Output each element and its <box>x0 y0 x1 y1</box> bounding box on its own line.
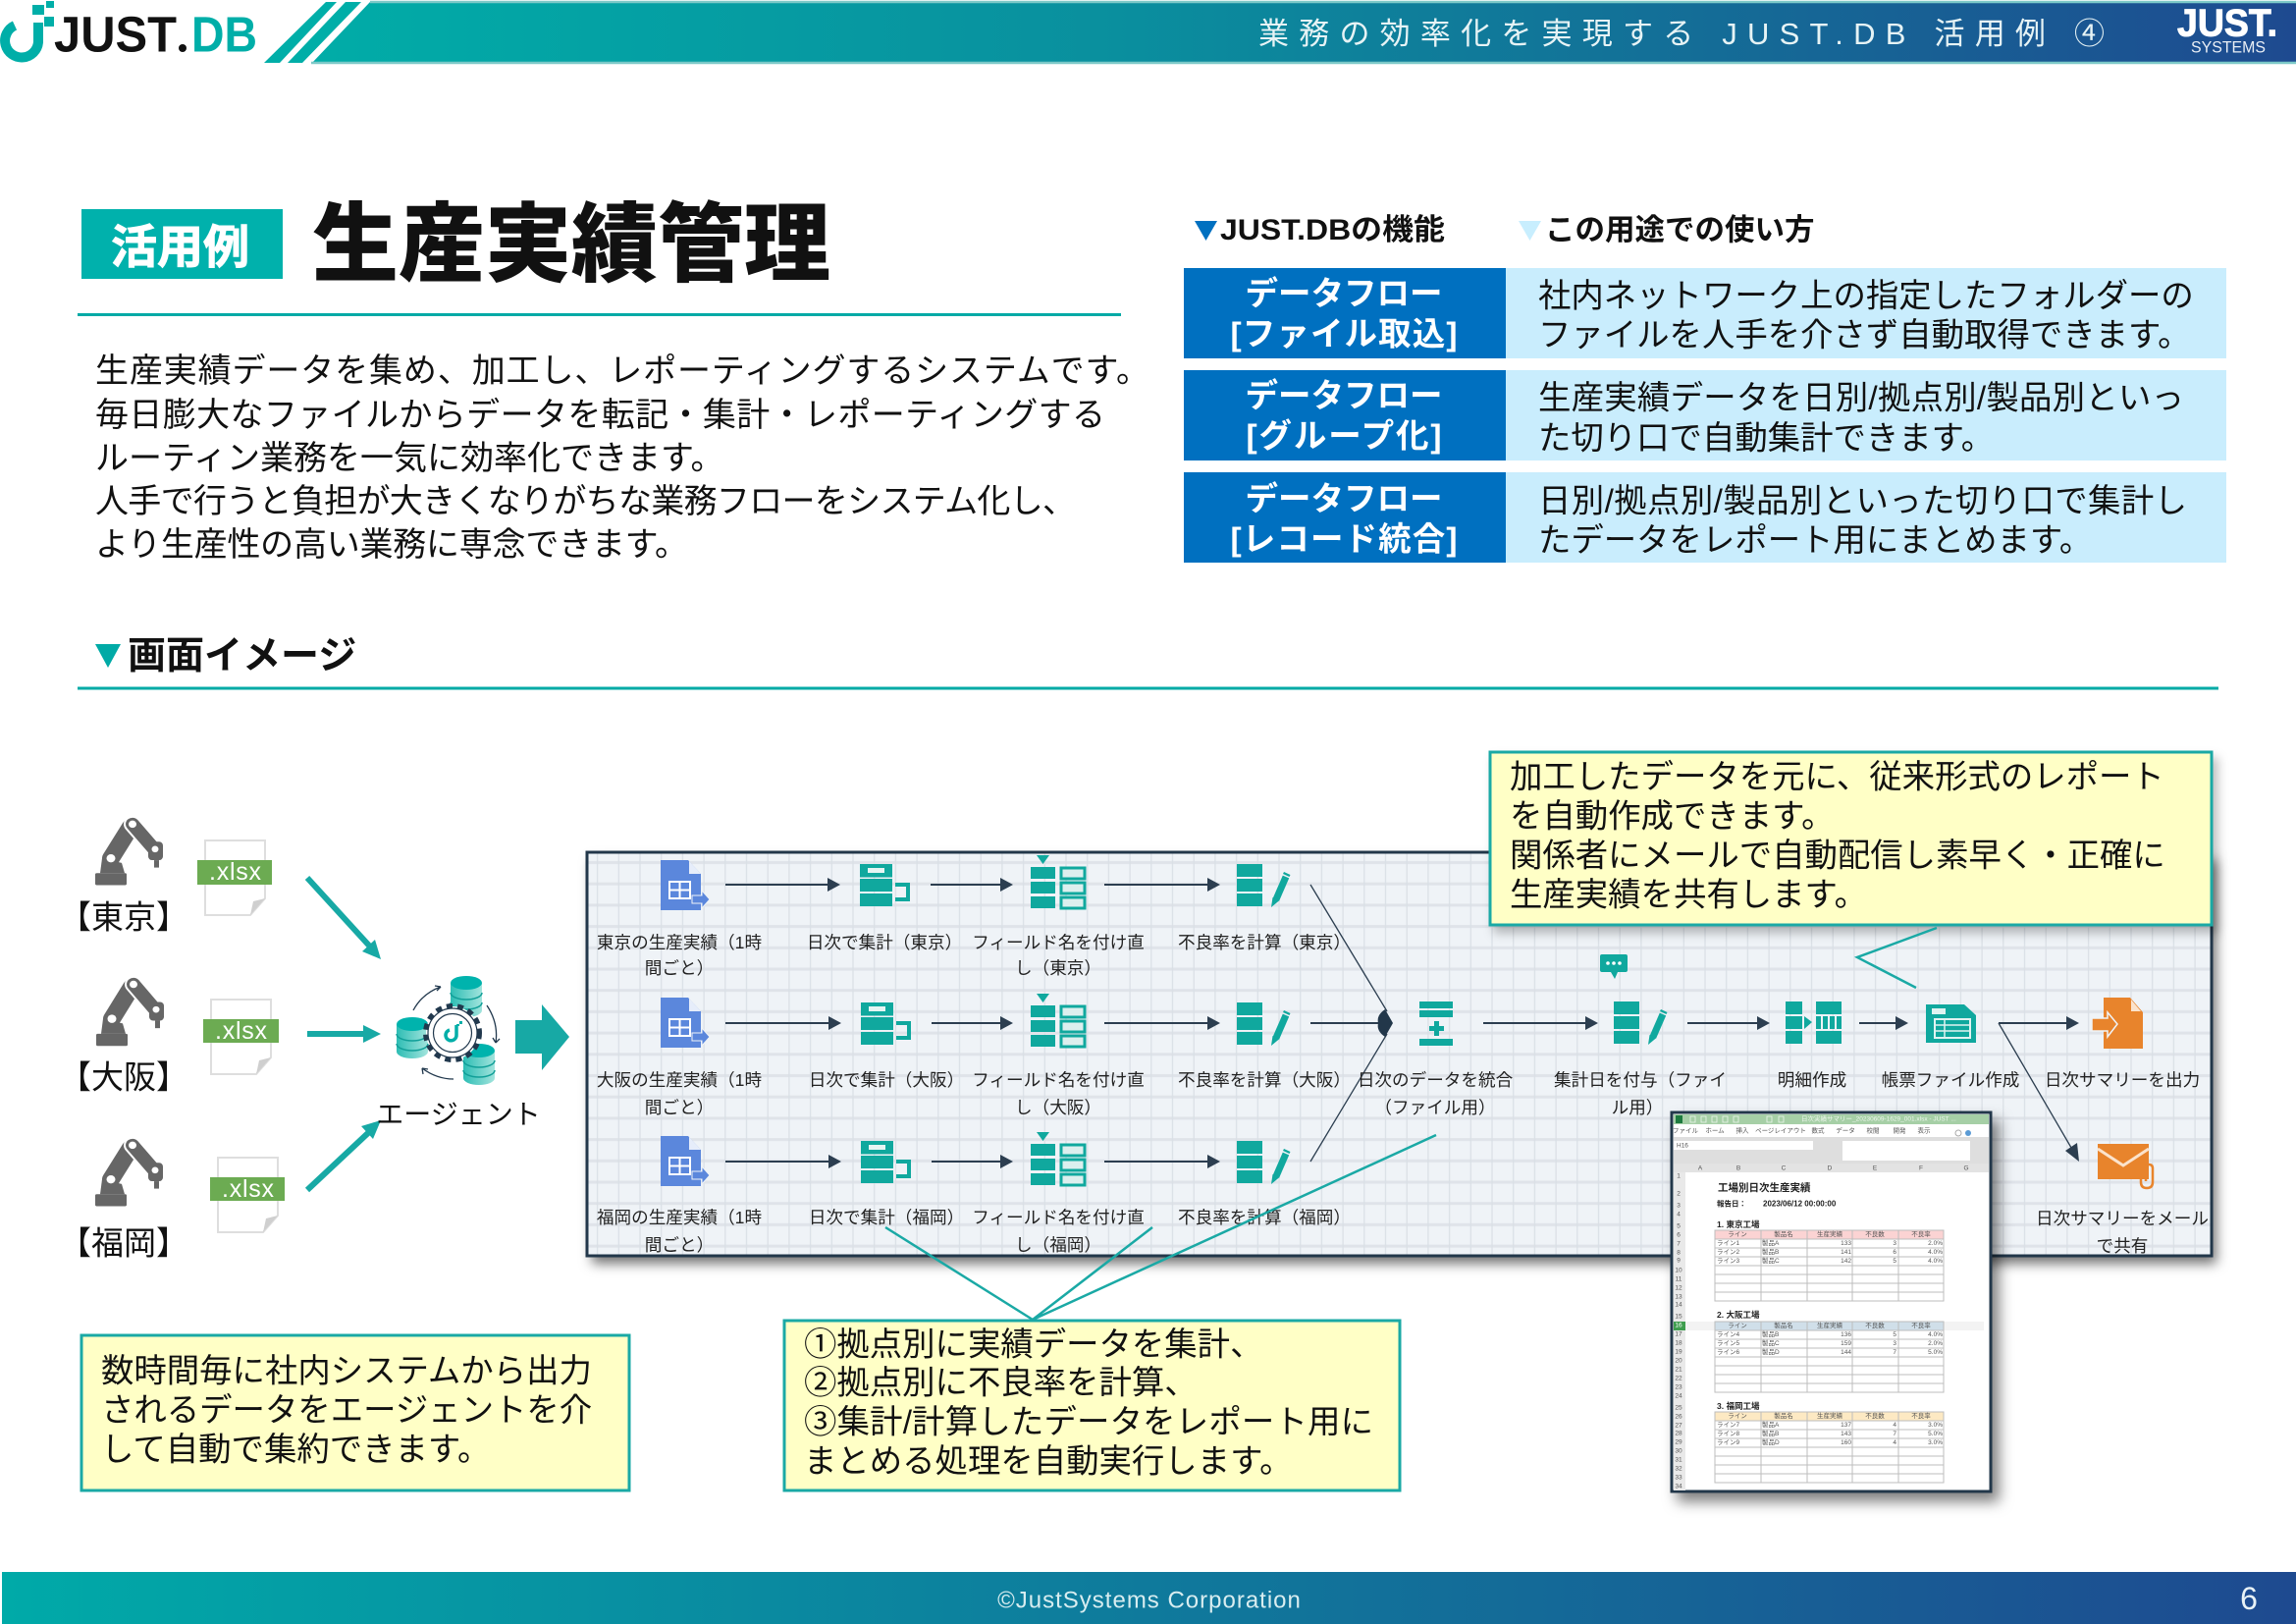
excel column headers: F <box>1919 1164 1923 1172</box>
icon: agent <box>397 976 500 1085</box>
sheet table: 福岡工場: ライン9 <box>1717 1438 1739 1446</box>
excel row headers: 27 <box>1675 1422 1682 1430</box>
callout: agent collection: 数時間毎に社内システムから出力 <box>101 1353 592 1389</box>
flow row: 大阪: 大阪の生産実績（1時 <box>597 1070 762 1090</box>
sheet table: 福岡工場: 生産実績 <box>1817 1411 1843 1420</box>
feature row: グループ化: た切り口で自動集計できます。 <box>1538 420 1994 457</box>
excel row headers: 19 <box>1675 1349 1682 1355</box>
excel row headers: 4 <box>1677 1212 1681 1218</box>
site: 大阪: 【大阪】 <box>59 1058 188 1096</box>
sheet table: 大阪工場: 5 <box>1893 1331 1896 1338</box>
sheet table: 東京工場: ライン3 <box>1717 1257 1739 1265</box>
feature row: グループ化: [グループ化] <box>1247 418 1441 455</box>
feature row: レコード統合: データフロー <box>1245 480 1443 517</box>
excel ribbon tabs: ファイル <box>1673 1127 1698 1135</box>
header band <box>264 2 2296 64</box>
arrow: 大阪 to agent <box>307 1025 381 1043</box>
sheet table: 東京工場: 142 <box>1841 1258 1851 1265</box>
excel row headers: 34 <box>1675 1483 1682 1490</box>
flow label: 統合: （ファイル用） <box>1374 1098 1496 1117</box>
excel row headers: 32 <box>1675 1465 1682 1473</box>
excel row headers: 1 <box>1677 1172 1681 1180</box>
callout: report creation: 加工したデータを元に、従来形式のレポート <box>1510 759 2164 795</box>
excel row headers: 14 <box>1675 1302 1682 1308</box>
excel row headers: 16 <box>1675 1322 1682 1329</box>
sheet table: 福岡工場: 3. 福岡工場 <box>1717 1401 1760 1411</box>
excel ribbon tabs: データ <box>1836 1125 1855 1135</box>
sheet table: 福岡工場: 3.0% <box>1928 1439 1943 1446</box>
description text: ルーティン業務を一気に効率化できます。 <box>95 440 724 477</box>
header title: 業務の効率化を実現する JUST.DB 活用例 ④ <box>1258 17 2105 51</box>
flow step: 集計日を付与: ル用） <box>1612 1098 1663 1117</box>
flow step: 帳票ファイル作成: 帳票ファイル作成 <box>1882 1070 2019 1090</box>
logo: JUST SYSTEMS: JUST. <box>2177 2 2277 45</box>
sheet table: 東京工場: 141 <box>1841 1249 1851 1256</box>
flow row: 東京: 東京の生産実績（1時 <box>597 933 762 952</box>
sheet title: 工場別日次生産実績 <box>1718 1181 1811 1194</box>
excel column headers <box>1674 1164 1989 1172</box>
heading: JUST.DBの機能: JUST.DBの機能 <box>1220 214 1445 246</box>
flow step: 日次サマリーを出力 <box>1999 998 2200 1090</box>
sheet table: 東京工場: 4.0% <box>1928 1258 1943 1265</box>
site: 大阪: .xlsx <box>215 1017 267 1045</box>
sheet table: 大阪工場: 製品D <box>1762 1347 1780 1356</box>
sheet table: 大阪工場: 製品名 <box>1774 1321 1793 1329</box>
excel row headers: 18 <box>1675 1339 1682 1347</box>
sheet table: 福岡工場: 製品A <box>1762 1420 1780 1429</box>
excel title bar <box>1674 1113 1989 1124</box>
feature row: グループ化: データフロー <box>1245 377 1443 414</box>
excel title bar: 日次実績サマリー_20230609-1629_001.xlsx - JUST ... <box>1801 1113 1956 1123</box>
excel formula bar: H16 <box>1677 1143 1688 1149</box>
sheet table: 福岡工場: ライン <box>1728 1412 1747 1420</box>
excel row headers: 26 <box>1675 1414 1682 1420</box>
sheet table: 東京工場: 製品名 <box>1774 1229 1793 1238</box>
copyright: ©JustSystems Corporation <box>997 1587 1302 1614</box>
sheet table: 大阪工場: 2.0% <box>1928 1340 1943 1347</box>
feature row: レコード統合: 日別/拠点別/製品別といった切り口で集計し <box>1538 483 2187 519</box>
excel column headers: C <box>1782 1164 1787 1172</box>
excel column headers: D <box>1828 1164 1833 1172</box>
callout: processing <box>784 1321 1400 1490</box>
excel row headers: 2 <box>1677 1190 1681 1198</box>
sheet table: 大阪工場: 3 <box>1893 1340 1896 1347</box>
feature row: ファイル取込: ファイルを人手を介さず自動取得できます。 <box>1538 317 2190 353</box>
icon: comment bubble <box>1600 954 1628 979</box>
flow row: 福岡: フィールド名を付け直 <box>972 1208 1145 1227</box>
sheet table: 東京工場: 5 <box>1893 1258 1896 1265</box>
callout pointers: processing <box>885 1135 1436 1320</box>
sheet table: 大阪工場: 136 <box>1841 1331 1851 1338</box>
excel row headers: 33 <box>1675 1475 1682 1481</box>
badge: 活用例: 活用例 <box>111 221 249 273</box>
sheet table: 大阪工場: 4.0% <box>1928 1331 1943 1338</box>
panel: data flow screenshot <box>587 852 2212 1256</box>
sheet table: 東京工場: 製品C <box>1762 1256 1780 1265</box>
sheet table: 東京工場: 6 <box>1893 1249 1896 1256</box>
site: 東京: .xlsx <box>209 858 261 886</box>
callout: processing: ③集計/計算したデータをレポート用に <box>804 1404 1373 1440</box>
flow row: 東京: フィールド名を付け直 <box>972 933 1145 952</box>
excel row headers: 7 <box>1677 1241 1681 1247</box>
excel row headers: 6 <box>1677 1231 1681 1239</box>
arrow: 東京 to agent <box>307 878 381 959</box>
sheet table: 福岡工場: 製品名 <box>1774 1411 1793 1420</box>
sheet table: 福岡工場: 製品D <box>1762 1437 1780 1446</box>
feature row: ファイル取込 <box>1184 268 2226 358</box>
sheet table: 大阪工場: 5.0% <box>1928 1349 1943 1356</box>
flow row: 福岡: 福岡の生産実績（1時 <box>597 1208 762 1227</box>
excel ribbon tabs <box>1673 1125 1971 1136</box>
excel row headers: 31 <box>1675 1457 1682 1463</box>
callout: report creation: 生産実績を共有します。 <box>1510 877 1867 913</box>
sheet table: 大阪工場 <box>1715 1310 1944 1392</box>
logo: JUST SYSTEMS: SYSTEMS <box>2191 37 2266 57</box>
sheet table: 大阪工場: ライン <box>1728 1322 1747 1329</box>
flow row: 大阪: フィールド名を付け直 <box>972 1070 1145 1090</box>
sheet table: 東京工場: 4.0% <box>1928 1249 1943 1256</box>
sheet table: 東京工場: 2.0% <box>1928 1240 1943 1247</box>
feature row: ファイル取込: [ファイル取込] <box>1231 316 1457 352</box>
excel row headers: 24 <box>1675 1392 1682 1400</box>
feature row: ファイル取込: データフロー <box>1245 275 1443 312</box>
excel column headers: G <box>1963 1164 1969 1172</box>
excel row headers: 11 <box>1676 1276 1682 1282</box>
excel ribbon tabs: 校閲 <box>1867 1125 1879 1135</box>
flow row: 大阪: 間ごと） <box>645 1098 714 1117</box>
flow label: 統合: 日次のデータを統合 <box>1358 1070 1514 1090</box>
sheet table: 東京工場: ライン2 <box>1717 1248 1739 1256</box>
description text: 生産実績データを集め、加工し、レポーティングするシステムです。 <box>95 352 1149 390</box>
sheet table: 東京工場: 3 <box>1893 1240 1896 1247</box>
excel ribbon tabs: 開発 <box>1893 1125 1906 1135</box>
flow row: 大阪: 日次で集計（大阪） <box>809 1070 964 1090</box>
feature row: レコード統合 <box>1184 472 2226 563</box>
big arrow to flow <box>515 1004 569 1070</box>
flow step: 集計日を付与: 集計日を付与（ファイ <box>1554 1070 1727 1090</box>
flow row: 福岡: 不良率を計算（福岡） <box>1178 1208 1351 1227</box>
excel row headers: 5 <box>1677 1223 1681 1229</box>
excel row headers: 17 <box>1675 1331 1682 1337</box>
excel row headers: 30 <box>1675 1447 1682 1455</box>
merge connectors <box>1310 885 1393 1162</box>
sheet table: 福岡工場: 5.0% <box>1928 1431 1943 1437</box>
callout: report creation: を自動作成できます。 <box>1510 798 1835 835</box>
sheet table: 大阪工場: 不良率 <box>1911 1321 1931 1329</box>
icon: merge step <box>1419 1001 1453 1046</box>
callout pointer: report <box>1857 928 1937 988</box>
flow step: メールで共有: 日次サマリーをメール <box>2036 1209 2209 1228</box>
sheet table: 東京工場: 生産実績 <box>1817 1229 1843 1238</box>
sheet table: 東京工場: 製品B <box>1762 1247 1779 1256</box>
flow row: 大阪: 不良率を計算（大阪） <box>1178 1070 1351 1090</box>
sheet table: 東京工場: 不良数 <box>1865 1229 1885 1238</box>
feature row: レコード統合: [レコード統合] <box>1231 521 1457 558</box>
sheet title <box>1717 1181 1837 1208</box>
excel row headers: 29 <box>1675 1439 1682 1445</box>
flow step: メールで共有 <box>1999 1023 2209 1256</box>
sheet table: 大阪工場: 製品C <box>1762 1338 1780 1347</box>
site: 福岡: 【福岡】 <box>59 1225 188 1261</box>
feature row: ファイル取込: 社内ネットワーク上の指定したフォルダーの <box>1538 278 2194 314</box>
flow row: 東京: 間ごと） <box>645 958 714 978</box>
sheet table: 大阪工場: ライン4 <box>1717 1330 1739 1338</box>
excel row headers: 23 <box>1675 1384 1682 1390</box>
sheet table: 東京工場 <box>1715 1219 1944 1301</box>
excel ribbon tabs: ページレイアウト <box>1755 1127 1806 1135</box>
arrow: 福岡 to agent <box>307 1120 381 1190</box>
description text: 毎日膨大なファイルからデータを転記・集計・レポーティングする <box>95 397 1105 434</box>
flow row: 福岡 <box>597 1132 1351 1255</box>
excel row headers: 22 <box>1675 1375 1682 1382</box>
flow row: 東京: 不良率を計算（東京） <box>1178 933 1351 952</box>
sheet table: 福岡工場: 製品B <box>1762 1429 1779 1437</box>
callout: report creation: 関係者にメールで自動配信し素早く・正確に <box>1510 838 2165 874</box>
site: 東京 <box>59 821 272 935</box>
flow label: 統合 <box>1358 1070 1514 1117</box>
flow row: 東京: 日次で集計（東京） <box>807 933 962 952</box>
sheet table: 福岡工場: 7 <box>1893 1431 1896 1437</box>
excel row headers: 9 <box>1677 1257 1681 1265</box>
excel report window <box>1672 1112 1991 1491</box>
site: 福岡: .xlsx <box>222 1175 275 1203</box>
feature row: レコード統合: たデータをレポート用にまとめます。 <box>1538 522 2092 559</box>
description text: より生産性の高い業務に専念できます。 <box>95 526 688 564</box>
title: 生産実績管理 <box>312 196 830 293</box>
excel ribbon tabs: 挿入 <box>1735 1125 1749 1135</box>
flow row: 福岡: 日次で集計（福岡） <box>809 1208 964 1227</box>
sheet table: 大阪工場: 7 <box>1893 1349 1896 1356</box>
sheet table: 福岡工場: 4 <box>1893 1439 1896 1446</box>
excel row headers: 28 <box>1675 1430 1682 1437</box>
excel ribbon tabs: ホーム <box>1705 1127 1725 1135</box>
excel column headers: B <box>1736 1164 1740 1172</box>
sheet table: 東京工場: 1. 東京工場 <box>1717 1219 1760 1229</box>
excel row headers: 10 <box>1675 1267 1682 1274</box>
excel ribbon tabs: 数式 <box>1812 1125 1825 1135</box>
excel row headers: 20 <box>1675 1357 1682 1365</box>
flow row: 福岡: 間ごと） <box>645 1235 714 1255</box>
heading: 画面イメージ: 画面イメージ <box>128 635 356 677</box>
sheet table: 東京工場: ライン <box>1728 1230 1747 1238</box>
sheet table: 福岡工場: ライン7 <box>1717 1421 1739 1429</box>
excel row headers: 3 <box>1677 1202 1681 1210</box>
flow step: 帳票ファイル作成 <box>1859 1004 2019 1090</box>
callout: agent collection: されるデータをエージェントを介 <box>101 1392 592 1429</box>
site: 大阪 <box>59 981 279 1096</box>
flow row: 東京: し（東京） <box>1015 958 1101 978</box>
callout: processing: まとめる処理を自動実行します。 <box>804 1443 1293 1480</box>
page number: 6 <box>2240 1581 2258 1616</box>
footer band <box>2 1572 2296 1624</box>
flow row: 東京 <box>597 855 1351 978</box>
flow step: 明細作成: 明細作成 <box>1778 1070 1846 1090</box>
flow step: 日次サマリーを出力: 日次サマリーを出力 <box>2045 1070 2200 1090</box>
excel formula bar <box>1674 1137 1989 1164</box>
badge: 活用例 <box>81 209 283 279</box>
callout: agent collection: して自動で集約できます。 <box>101 1432 490 1468</box>
sheet table: 東京工場: 不良率 <box>1911 1229 1931 1238</box>
sheet table: 東京工場: 133 <box>1841 1240 1851 1247</box>
excel row headers: 25 <box>1675 1404 1682 1412</box>
excel row headers: 21 <box>1675 1367 1682 1373</box>
flow row: 福岡: し（福岡） <box>1015 1235 1101 1255</box>
site: 福岡 <box>59 1142 285 1261</box>
excel row headers <box>1674 1172 1984 1490</box>
logo: JUST.DB: DB <box>191 6 257 63</box>
sheet table: 福岡工場: ライン8 <box>1717 1430 1739 1437</box>
callout: report creation <box>1490 752 2212 925</box>
agent label: エージェント <box>376 1100 541 1129</box>
callout: agent collection <box>81 1335 629 1490</box>
sheet table: 福岡工場: 143 <box>1841 1431 1851 1437</box>
sheet table: 東京工場: 製品A <box>1762 1238 1780 1247</box>
sheet table: 大阪工場: 159 <box>1841 1340 1851 1347</box>
description text <box>95 352 1149 564</box>
sheet table: 大阪工場: 生産実績 <box>1817 1321 1843 1329</box>
sheet table: 福岡工場: 3.0% <box>1928 1422 1943 1429</box>
sheet table: 大阪工場: ライン6 <box>1717 1348 1739 1356</box>
excel row headers: 8 <box>1677 1249 1681 1257</box>
flow step: 明細作成 <box>1687 1001 1846 1090</box>
sheet table: 大阪工場: 2. 大阪工場 <box>1717 1310 1760 1320</box>
excel column headers: E <box>1873 1164 1878 1172</box>
sheet table: 大阪工場: 144 <box>1841 1349 1851 1356</box>
feature row: グループ化: 生産実績データを日別/拠点別/製品別といっ <box>1538 380 2184 416</box>
flow row: 大阪: し（大阪） <box>1015 1098 1101 1117</box>
sheet table: 大阪工場: ライン5 <box>1717 1339 1739 1347</box>
logo: JUST.DB <box>5 1 257 63</box>
excel row headers: 15 <box>1675 1314 1682 1320</box>
sheet table: 福岡工場 <box>1715 1401 1944 1483</box>
sheet table: 大阪工場: 製品B <box>1762 1329 1779 1338</box>
sheet title: 報告日： <box>1717 1198 1746 1208</box>
sheet table: 福岡工場: 160 <box>1841 1439 1851 1446</box>
callout: processing: ①拠点別に実績データを集計、 <box>804 1326 1262 1363</box>
sheet table: 福岡工場: 137 <box>1841 1422 1851 1429</box>
site: 東京: 【東京】 <box>59 899 188 935</box>
excel row headers: 13 <box>1675 1294 1682 1300</box>
sheet table: 福岡工場: 不良数 <box>1865 1411 1885 1420</box>
excel ribbon tabs: 表示 <box>1918 1125 1931 1135</box>
logo: JUST.DB: JUST <box>54 6 177 63</box>
callout: processing: ②拠点別に不良率を計算、 <box>804 1365 1198 1401</box>
flow step: メールで共有: で共有 <box>2097 1236 2148 1256</box>
heading: この用途での使い方: この用途での使い方 <box>1545 214 1814 247</box>
sheet table: 福岡工場: 4 <box>1893 1422 1896 1429</box>
description text: 人手で行うと負担が大きくなりがちな業務フローをシステム化し、 <box>95 483 1076 520</box>
sheet table: 東京工場: ライン1 <box>1717 1239 1739 1247</box>
flow row: 大阪 <box>597 994 1351 1117</box>
feature row: グループ化 <box>1184 370 2226 460</box>
sheet table: 大阪工場: 不良数 <box>1865 1321 1885 1329</box>
sheet title: 2023/06/12 00:00:00 <box>1763 1200 1837 1208</box>
excel column headers: A <box>1698 1164 1703 1172</box>
sheet table: 福岡工場: 不良率 <box>1911 1411 1931 1420</box>
excel row headers: 12 <box>1675 1284 1682 1292</box>
flow step: 集計日を付与 <box>1483 1001 1727 1117</box>
